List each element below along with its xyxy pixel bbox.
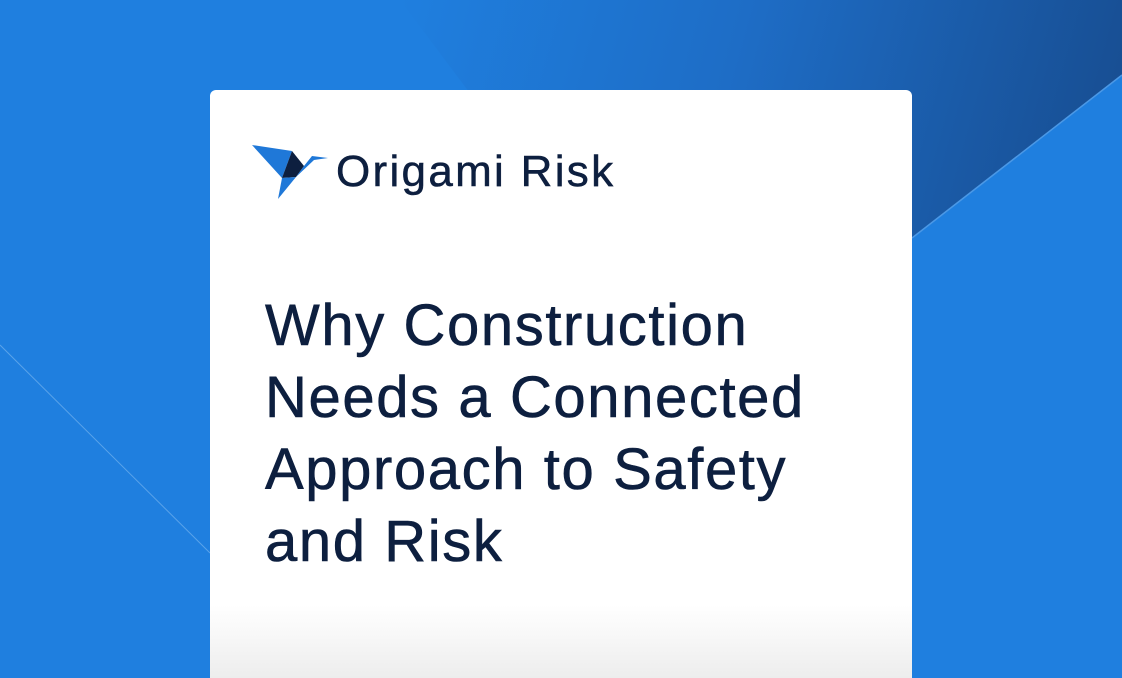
title: Approach to Safety: [265, 437, 787, 502]
title: [264, 293, 805, 574]
title: and Risk: [265, 509, 503, 574]
icon: origami bird: [252, 145, 328, 199]
title: Needs a Connected: [265, 365, 805, 430]
logo: [252, 145, 615, 199]
panel: card: [210, 90, 912, 678]
logo text: Origami Risk: [336, 147, 615, 196]
title: Why Construction: [265, 293, 748, 358]
